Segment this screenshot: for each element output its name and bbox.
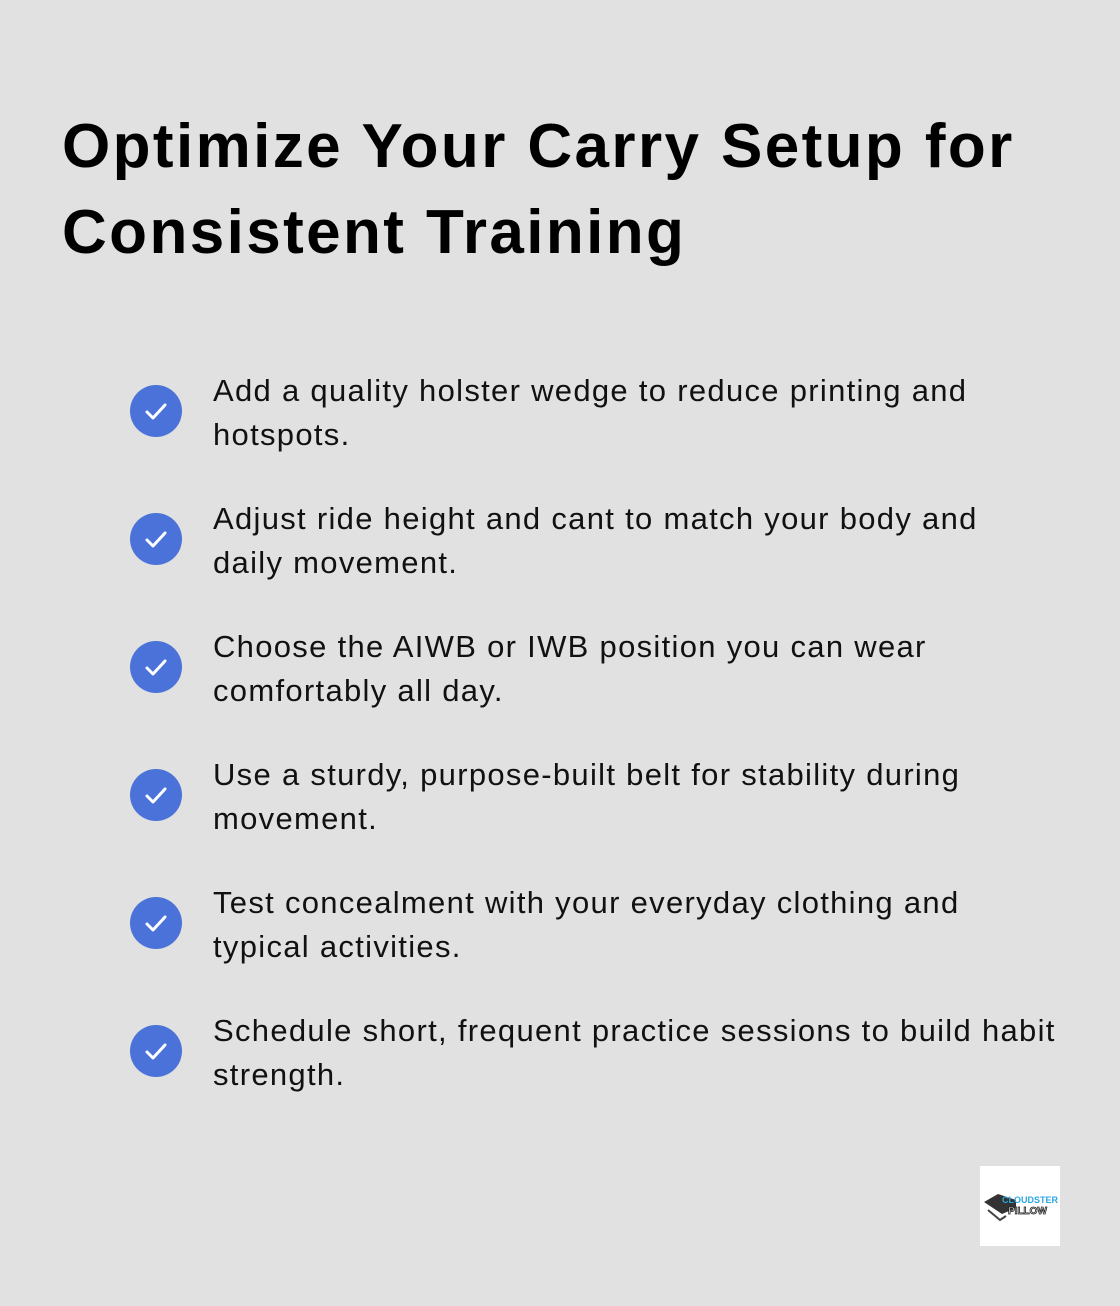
item 6	[130, 1013, 1056, 1092]
item 3	[130, 629, 927, 708]
logo: CLOUDSTER	[1002, 1195, 1058, 1205]
item 1	[130, 373, 967, 452]
item 6: strength.	[213, 1057, 345, 1092]
icon: check	[130, 769, 182, 821]
item 3: Choose the AIWB or IWB position you can wear	[213, 629, 927, 664]
item 3: comfortably all day.	[213, 673, 504, 708]
item 1: Add a quality holster wedge to reduce printing and	[213, 373, 967, 408]
item 4: movement.	[213, 801, 378, 836]
icon: check	[130, 513, 182, 565]
item 2	[130, 501, 978, 580]
icon: check	[130, 385, 182, 437]
title: Consistent Training	[62, 198, 686, 267]
item 1: hotspots.	[213, 417, 351, 452]
icon: check	[130, 641, 182, 693]
item 2: Adjust ride height and cant to match your body and	[213, 501, 978, 536]
title: Optimize Your Carry Setup for	[62, 112, 1015, 181]
title	[62, 112, 1015, 267]
item 4: Use a sturdy, purpose-built belt for stability during	[213, 757, 960, 792]
item 5: typical activities.	[213, 929, 462, 964]
icon: check	[130, 1025, 182, 1077]
logo: PILLOW	[1008, 1206, 1047, 1217]
item 4	[130, 757, 960, 836]
item 6: Schedule short, frequent practice sessions to build habit	[213, 1013, 1056, 1048]
logo	[980, 1166, 1060, 1246]
item 5	[130, 885, 960, 964]
icon: check	[130, 897, 182, 949]
item 2: daily movement.	[213, 545, 458, 580]
item 5: Test concealment with your everyday clothing and	[213, 885, 960, 920]
